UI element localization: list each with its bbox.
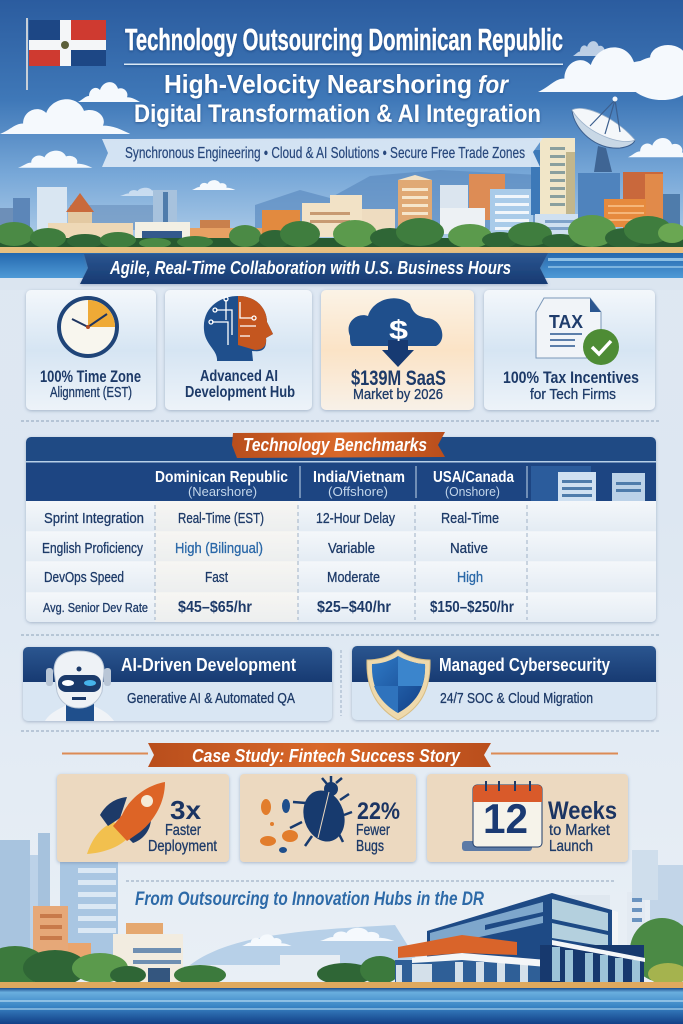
panel: faster deployment [57,774,229,862]
table body text: Real-Time (EST) [178,510,264,527]
panel: time zone: 100% Time Zone [40,367,141,386]
icon: cloud with dollar: $ [389,315,408,345]
table column headers: (Nearshore) [188,484,257,499]
ribbon: tagline [102,138,543,167]
panel: technology benchmarks table [26,432,656,622]
panel: SaaS market [321,290,474,410]
hero trees [0,215,683,248]
icon: AI head [204,296,273,361]
bottom trees [0,918,683,986]
table column headers: Dominican Republic [155,469,288,486]
title [124,22,563,128]
table body text: Native [450,540,488,557]
table heading banner: Technology Benchmarks [243,435,427,455]
case study banner: Case Study: Fintech Success Story [192,746,461,766]
panel: fewer bugs: Fewer [356,822,390,839]
table body text: High [457,569,483,586]
panel: time zone: Alignment (EST) [50,385,132,401]
table body text: Avg. Senior Dev Rate [43,600,148,615]
table column headers: (Offshore) [328,484,388,499]
panel: faster deployment: Faster [165,822,201,839]
panel: tax incentives: for Tech Firms [530,386,616,403]
panel: AI-driven development: Generative AI & Automated QA [127,690,295,707]
panel: faster deployment: Deployment [148,838,218,855]
table body text: $150–$250/hr [430,599,514,616]
table column headers: India/Vietnam [313,469,405,486]
icon: tax document: TAX [549,312,583,332]
icon: clock [59,298,117,356]
table body text: $45–$65/hr [178,599,252,616]
panel: faster deployment: 3x [170,795,202,825]
ribbon: collaboration: Agile, Real-Time Collaboration with U.S. Business Hours [109,258,511,278]
icon: Dominican flag [26,18,106,90]
row backgrounds [26,501,656,622]
bottom skyline background [0,833,683,982]
ribbon: tagline: Synchronous Engineering • Cloud & AI Solutions • Secure Free Trade Zones [125,145,525,162]
panel: weeks to market: Weeks [548,797,617,825]
panel: AI hub [165,290,312,410]
icon: tax document [536,298,619,365]
panel: AI-driven development: AI-Driven Development [121,655,296,675]
icon: satellite dish [572,96,635,172]
panel: managed cybersecurity: 24/7 SOC & Cloud Migration [440,690,593,707]
icon: rocket [87,782,165,854]
table body text [42,510,514,616]
table body text: English Proficiency [42,540,143,557]
table column headers: USA/Canada [433,469,514,486]
table body text: Moderate [327,569,380,586]
icon: bug [290,776,352,847]
icon: calendar [462,781,542,851]
panel: time zone [26,290,156,410]
panel: fewer bugs: 22% [357,798,400,825]
icon: cloud with dollar [349,298,442,367]
panel: fewer bugs [240,774,416,862]
icon: calendar: 12 [483,795,528,842]
title: Digital Transformation & AI Integration [134,100,541,128]
panel: AI hub: Development Hub [185,384,295,401]
table body text: $25–$40/hr [317,599,391,616]
table body text: Variable [328,540,375,557]
table column headers [155,469,514,499]
table body text: High (Bilingual) [175,540,263,557]
icon: bug fragments [260,799,298,853]
title: High-Velocity Nearshoring [164,69,472,99]
case study banner [62,743,618,767]
table body text: Fast [205,569,229,586]
title: for [478,71,509,99]
panel: tax incentives: 100% Tax Incentives [503,368,639,387]
table body text: DevOps Speed [44,569,124,586]
panel: fewer bugs: Bugs [356,838,384,855]
table body text: Real-Time [441,510,499,527]
ribbon: collaboration [80,253,548,284]
panel: managed cybersecurity: Managed Cybersecurity [439,655,610,675]
table column headers: (Onshore) [445,484,500,499]
panel: tax incentives [484,290,655,410]
icon: shield [367,650,430,720]
icon: robot [45,651,114,721]
bottom shoreline and water [0,982,683,1024]
panel: AI-driven development [23,647,332,721]
icon: header buildings [531,466,645,501]
hero sky [0,0,683,250]
hero skyline [0,138,680,246]
panel: SaaS market: Market by 2026 [353,386,443,403]
panel: SaaS market: $139M SaaS [351,367,446,390]
closing tagline: From Outsourcing to Innovation Hubs in the DR [135,889,484,910]
table body text: Sprint Integration [44,510,144,527]
panel: managed cybersecurity [352,646,656,720]
panel: weeks to market [427,774,628,862]
innovation hub building [395,893,645,983]
hero shoreline and water [0,247,683,290]
table body text: 12-Hour Delay [316,510,395,527]
panel: AI hub: Advanced AI [200,368,278,385]
panel: weeks to market: Launch [549,838,593,855]
panel: weeks to market: to Market [549,822,611,839]
